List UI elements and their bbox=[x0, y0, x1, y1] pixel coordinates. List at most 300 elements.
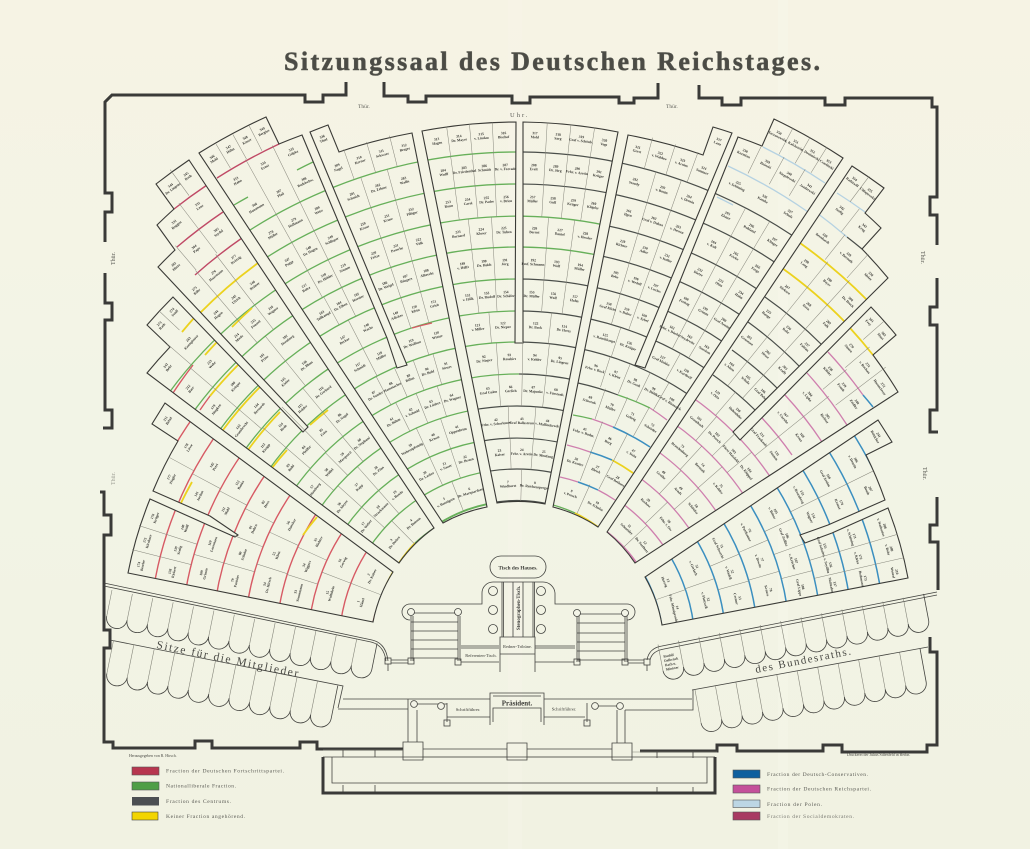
seats: 309 bbox=[334, 163, 340, 168]
seats: Dr. Lüders bbox=[424, 401, 441, 410]
seats: Graf Schwerin bbox=[711, 537, 725, 559]
seats: 302 bbox=[880, 331, 887, 337]
seats: Wehr bbox=[208, 360, 217, 370]
seats: Krause bbox=[834, 498, 842, 511]
seats: 260 bbox=[591, 201, 597, 206]
seats: Becker bbox=[339, 337, 351, 346]
seats: 296 bbox=[748, 223, 755, 229]
seats: v. Unruhe bbox=[776, 411, 789, 425]
seats: 118 bbox=[376, 351, 383, 357]
seats: Völk bbox=[415, 241, 423, 246]
seats: v. Below bbox=[767, 507, 777, 520]
referees' table: Referenten-Tisch. bbox=[465, 653, 497, 658]
seats: 36 bbox=[337, 501, 342, 507]
seats: Dr. Klöppel bbox=[739, 464, 753, 481]
seats: Dr. Nieper bbox=[476, 358, 493, 364]
seats: 332 bbox=[194, 201, 201, 207]
seats: 37 bbox=[354, 482, 359, 488]
seats: Reimer bbox=[249, 281, 261, 291]
panel: president's dais bbox=[323, 690, 717, 760]
seats: 254 bbox=[465, 197, 471, 202]
seats: 288 bbox=[531, 163, 537, 167]
seats: Schmidt bbox=[353, 363, 367, 373]
seats: Kerner bbox=[354, 158, 367, 165]
seats: 163 bbox=[703, 344, 710, 350]
seats: Banks bbox=[237, 479, 245, 490]
seats: Maltzahn bbox=[828, 577, 834, 592]
seats: Krüger bbox=[592, 173, 605, 179]
seats: 211 bbox=[163, 416, 169, 422]
seats bbox=[431, 123, 609, 501]
seats: 140 bbox=[180, 524, 186, 531]
seats: Dr. Schäfer bbox=[497, 294, 515, 298]
seats: Beuth bbox=[863, 486, 870, 496]
panel: left Bundesrat members' benches bbox=[104, 583, 388, 729]
seats: 261 bbox=[626, 209, 632, 214]
seats: Frank bbox=[836, 383, 845, 393]
seats: Dr. Braun bbox=[458, 457, 474, 465]
seats: 349 bbox=[259, 126, 266, 132]
seats: Graf Arnim bbox=[819, 469, 831, 487]
seats: 101 bbox=[696, 416, 703, 422]
seats: 177 bbox=[166, 474, 172, 481]
seats: Klotz bbox=[275, 550, 282, 560]
seats: Wolf bbox=[552, 264, 561, 268]
seats: 21 bbox=[442, 461, 447, 466]
seats: 251 bbox=[384, 214, 390, 219]
seats: v. Bennigsen bbox=[436, 497, 455, 509]
seats: 11 bbox=[627, 524, 632, 529]
seats: Mosle bbox=[235, 334, 244, 343]
seats: v. Benda bbox=[391, 490, 404, 501]
seats: Beseler bbox=[140, 559, 146, 571]
seats: 259 bbox=[570, 198, 576, 203]
seats: Dr. Hölder bbox=[317, 273, 334, 284]
seats: Buhl bbox=[287, 464, 295, 472]
seats: 278 bbox=[268, 229, 274, 236]
seats: Carol bbox=[464, 201, 473, 206]
seats: v. Denzin bbox=[847, 455, 857, 469]
seats: Graf Kleist bbox=[599, 304, 617, 312]
seats: 13 bbox=[665, 578, 671, 583]
seats: v. Rohr bbox=[884, 544, 891, 556]
seats: 191 bbox=[502, 258, 508, 262]
panel: seat block, far right wing bbox=[644, 419, 909, 626]
legend: left parties: Fraction der Deutschen Fortschrittspartei. bbox=[166, 768, 285, 774]
seats: 334 bbox=[260, 161, 267, 167]
seats: Bleich bbox=[591, 467, 601, 475]
seats: Senff bbox=[171, 308, 180, 317]
seats: 78 bbox=[768, 588, 773, 592]
seats: Krauss bbox=[764, 585, 770, 597]
seats: Grimm bbox=[697, 308, 709, 317]
seats: Dr. Nieper bbox=[495, 325, 512, 330]
seats: Lanz bbox=[713, 140, 722, 147]
seats: 65 bbox=[486, 386, 490, 391]
seats: Dr. Hertz bbox=[556, 327, 572, 334]
seats: Dr. Sander bbox=[367, 390, 384, 402]
seats: Grothe bbox=[656, 470, 667, 481]
seats: Frege bbox=[751, 266, 760, 274]
seats: Dr. Wolfson bbox=[403, 340, 422, 349]
seats: 70 bbox=[609, 402, 614, 407]
seats: v. Miller bbox=[471, 327, 485, 332]
seats: Frhr. Minnigerode bbox=[668, 594, 679, 623]
seats: Kamke bbox=[757, 196, 769, 205]
seats: 327 bbox=[787, 208, 793, 215]
seats: v. Hessler bbox=[577, 234, 593, 241]
seats: Hahn bbox=[233, 178, 243, 186]
seats: 245 bbox=[230, 294, 237, 301]
seats: 189 bbox=[460, 262, 465, 266]
seats: Dorn bbox=[802, 303, 810, 311]
seats: v. Below bbox=[619, 309, 633, 317]
seats: Chlapowski bbox=[859, 186, 876, 201]
seats: 271 bbox=[864, 362, 871, 368]
seats: Bebel bbox=[165, 416, 173, 426]
seats: 212 bbox=[185, 384, 191, 391]
seats: v. Kehler bbox=[712, 482, 724, 495]
seats: Dernburg bbox=[280, 334, 295, 346]
seats: 7 bbox=[507, 480, 509, 484]
seats: 187 bbox=[402, 274, 408, 279]
seats: 213 bbox=[206, 359, 213, 366]
seats: v. Hölk bbox=[462, 297, 474, 302]
seats: 150 bbox=[411, 304, 418, 310]
seats: Adickes bbox=[391, 313, 404, 321]
seats: 275 bbox=[191, 286, 198, 292]
seats: Sieurs bbox=[442, 364, 453, 371]
seats: Hasenclever bbox=[873, 379, 887, 396]
seats: 64 bbox=[449, 393, 454, 398]
seats: 148 bbox=[363, 323, 370, 328]
seats: Frhr. v. Dücker bbox=[659, 324, 682, 338]
seats: Albrecht bbox=[420, 271, 435, 278]
seats: v. Kehler bbox=[527, 357, 542, 362]
seats: Kreuz bbox=[794, 433, 803, 443]
seats: v. Nathusius bbox=[876, 518, 886, 537]
seats: 221 bbox=[393, 243, 399, 249]
seats: v. Sauer bbox=[439, 463, 453, 472]
table of the house: Tisch des Hauses. bbox=[499, 566, 538, 572]
seats: 292 bbox=[632, 177, 638, 182]
left secretary: Schriftführer. bbox=[456, 707, 480, 712]
door and clock labels bbox=[111, 104, 927, 485]
seats: Wehrenpfennig bbox=[401, 442, 424, 456]
seats: Lang bbox=[800, 261, 809, 269]
seats: 290 bbox=[574, 166, 580, 171]
seats: 267 bbox=[784, 284, 791, 290]
seats: 122 bbox=[500, 321, 506, 325]
seats: v. Kröcher bbox=[788, 553, 797, 571]
seats: Dr. Kaiser bbox=[367, 568, 378, 584]
seats: Seelig bbox=[176, 545, 183, 555]
seats: v. Puttkamer bbox=[740, 523, 752, 543]
outline bbox=[553, 119, 843, 527]
outline bbox=[147, 160, 434, 563]
seats: 80 bbox=[238, 551, 243, 556]
seats: Gerst bbox=[632, 148, 642, 154]
seats: 279 bbox=[290, 217, 297, 223]
seats: 43 bbox=[520, 417, 524, 421]
seats: 217 bbox=[301, 283, 308, 289]
seats: 252 bbox=[408, 207, 414, 212]
seats: Jüngken bbox=[211, 403, 222, 416]
seats: Dr. Schulze bbox=[587, 500, 604, 513]
seats: Tellkampf bbox=[316, 310, 332, 322]
seats: 299 bbox=[826, 277, 833, 283]
seats: v. Waldow bbox=[651, 153, 668, 162]
seats: 169 bbox=[825, 473, 831, 480]
seats: 263 bbox=[675, 224, 681, 230]
seat note: Minister bbox=[665, 665, 680, 672]
title: Sitzungssaal des Deutschen Reichstages. bbox=[284, 47, 820, 76]
seats: 149 bbox=[392, 311, 399, 316]
seats: 115 bbox=[297, 403, 303, 409]
seats: Seydel bbox=[213, 229, 224, 238]
seats: 56 bbox=[286, 520, 291, 525]
panel: seat block, centre right bbox=[552, 118, 844, 528]
seats: 123 bbox=[533, 321, 538, 326]
seats: 35 bbox=[313, 537, 318, 542]
seats: 180 bbox=[230, 381, 236, 387]
seats: Wölfel bbox=[325, 468, 334, 478]
seats: 1 bbox=[356, 600, 361, 603]
door and clock labels: Thür. bbox=[111, 472, 117, 485]
seats: 186 bbox=[381, 281, 388, 286]
seats: 281 bbox=[349, 191, 355, 197]
seats: 106 bbox=[784, 532, 790, 539]
seats: 237 bbox=[804, 341, 810, 348]
seats: 73 bbox=[680, 444, 685, 449]
seats: 10 bbox=[595, 500, 600, 505]
party arcs bbox=[646, 436, 880, 624]
seats: Jazdzewski bbox=[799, 183, 816, 196]
seat note: Rudolf bbox=[663, 653, 675, 659]
seats: 328 bbox=[822, 232, 828, 239]
seats: Thiel bbox=[319, 137, 328, 144]
seats: Struckmann bbox=[373, 502, 389, 518]
seats: 23 bbox=[498, 449, 501, 453]
seats: Bernuth bbox=[694, 462, 706, 474]
seats: 320 bbox=[601, 138, 607, 143]
seats: 282 bbox=[375, 183, 381, 188]
table of the house bbox=[490, 556, 546, 578]
seats: Gehrig bbox=[625, 414, 637, 422]
seats: 49 bbox=[678, 486, 683, 491]
seats: Czarlinski bbox=[819, 159, 834, 171]
bench row 2 bbox=[105, 640, 338, 729]
seats: Müller bbox=[527, 199, 538, 203]
bench row 1 bbox=[658, 594, 931, 681]
panel: seat block, centre bbox=[421, 122, 619, 505]
seats: Wallis bbox=[399, 179, 410, 185]
seats: Mohl bbox=[531, 135, 539, 139]
seats: 34 bbox=[302, 563, 307, 568]
seats: 311 bbox=[378, 149, 384, 154]
seats: Saucken bbox=[698, 345, 711, 355]
seats: v. Denzin bbox=[680, 196, 695, 205]
seats: Dirksen bbox=[779, 285, 791, 296]
seats: 227 bbox=[557, 228, 563, 232]
seats: 89 bbox=[406, 373, 411, 378]
seats: 172 bbox=[858, 554, 863, 560]
seats: 223 bbox=[455, 230, 461, 235]
seats: Vogt bbox=[600, 142, 608, 147]
seats: 154 bbox=[503, 290, 509, 294]
seats: Dr. Blum bbox=[300, 360, 314, 372]
seats: Sarg bbox=[554, 136, 562, 141]
seats: 58 bbox=[324, 467, 329, 473]
seats: 31 bbox=[694, 564, 699, 569]
seats: v. Kalt bbox=[706, 242, 718, 250]
seats bbox=[208, 125, 484, 511]
seats: 257 bbox=[530, 195, 535, 199]
seats: v. Hülft bbox=[457, 265, 470, 271]
rear piers and wall bbox=[403, 742, 632, 760]
seats: 286 bbox=[481, 164, 487, 168]
seats: Wolff bbox=[183, 523, 190, 533]
seats: Kraus bbox=[359, 224, 370, 231]
seats: 319 bbox=[578, 135, 584, 139]
seats: 9 bbox=[570, 489, 573, 493]
seats: 188 bbox=[423, 268, 429, 273]
seats: 156 bbox=[551, 292, 556, 296]
seats: Kruse bbox=[383, 217, 394, 223]
seats: 270 bbox=[848, 343, 855, 349]
seats: 3 bbox=[389, 538, 393, 542]
seats: 202 bbox=[764, 349, 771, 356]
seats: Pflüger bbox=[406, 210, 419, 217]
seats: 84 bbox=[301, 445, 306, 450]
seats: Dr. Wagner bbox=[443, 395, 462, 403]
seats: 99 bbox=[651, 386, 656, 392]
seats: 126 bbox=[626, 340, 633, 346]
seats: 175 bbox=[142, 537, 148, 543]
seats: Schmidt bbox=[347, 193, 361, 202]
seats: Dr. Moufang bbox=[533, 452, 553, 459]
seats: Rosshirt bbox=[503, 357, 517, 361]
seats: 79 bbox=[230, 578, 235, 583]
seats: 33 bbox=[293, 590, 298, 594]
seats: 164 bbox=[728, 361, 735, 367]
seats: Bischof bbox=[498, 135, 510, 139]
seats: Roth bbox=[184, 174, 193, 181]
seats: Rochow bbox=[640, 498, 652, 509]
legend: left parties: Nationalliberale Fraction. bbox=[166, 784, 237, 790]
seats: 322 bbox=[657, 151, 664, 156]
seats: 132 bbox=[774, 450, 780, 457]
seats: Baer bbox=[187, 385, 195, 394]
seats: Hoffmann bbox=[288, 218, 303, 229]
seats: 141 bbox=[194, 491, 200, 497]
seats: 240 bbox=[854, 399, 860, 405]
seats: 244 bbox=[213, 309, 219, 316]
seats: Herz bbox=[263, 500, 271, 509]
seats: 335 bbox=[288, 147, 295, 153]
seats: 236 bbox=[785, 325, 792, 331]
seats: 231 bbox=[664, 253, 670, 259]
seats: Beyer bbox=[822, 279, 832, 288]
right steps bbox=[577, 614, 627, 662]
seats: Dr. Groß bbox=[627, 379, 641, 388]
seats: 32 bbox=[706, 597, 711, 602]
seats: Most bbox=[876, 332, 885, 341]
seats: 142 bbox=[209, 462, 215, 469]
legend: right parties bbox=[733, 770, 872, 820]
seats: 306 bbox=[251, 202, 258, 208]
credit lines: Herausgegeben von R. Hirsch. bbox=[129, 754, 177, 758]
seats: Schlieper bbox=[325, 236, 340, 246]
seats: 301 bbox=[868, 317, 875, 323]
seats: 353 bbox=[825, 158, 832, 165]
seats: Hamburg bbox=[309, 482, 322, 497]
seats: 109 bbox=[199, 570, 204, 576]
seats: Dr. Weigel bbox=[378, 282, 394, 292]
seats: 269 bbox=[825, 319, 832, 326]
seats: 86 bbox=[337, 412, 342, 418]
seats: v. Otto bbox=[710, 391, 720, 400]
seats bbox=[155, 170, 422, 550]
seats: 96 bbox=[594, 363, 598, 368]
seats: Jörg bbox=[501, 262, 509, 266]
seats: 235 bbox=[765, 309, 772, 315]
seats: 268 bbox=[805, 301, 812, 308]
seats: 19 bbox=[392, 490, 398, 495]
seats: 127 bbox=[659, 355, 666, 361]
seats: 326 bbox=[761, 194, 768, 200]
seats: 38 bbox=[373, 465, 379, 471]
legend: left parties: Fraction des Centrums. bbox=[166, 799, 232, 805]
seats: Kozmian bbox=[736, 150, 751, 159]
seats: 72 bbox=[650, 422, 655, 428]
seats: 112 bbox=[235, 480, 241, 486]
left steps bbox=[411, 613, 460, 661]
seats: 103 bbox=[730, 448, 737, 455]
seats: 25 bbox=[542, 450, 546, 454]
seats: v. Kleist bbox=[608, 372, 622, 380]
seats: 166 bbox=[760, 388, 766, 395]
seats: 233 bbox=[717, 278, 724, 284]
seat note: Rath u. bbox=[665, 661, 677, 667]
seats: v. Gerlach bbox=[688, 560, 698, 576]
seats: Zeidler bbox=[849, 399, 859, 410]
seats: 307 bbox=[276, 188, 282, 195]
panel: seat block, left wing bbox=[146, 159, 435, 564]
seats: Hahn bbox=[734, 292, 743, 300]
legend: right parties: Fraction der Polen. bbox=[767, 802, 823, 808]
credit lines bbox=[129, 753, 910, 758]
party arcs bbox=[554, 146, 826, 526]
seats: 42 bbox=[494, 418, 498, 422]
panel: seat block, far left wing bbox=[127, 402, 394, 623]
seats: Klöpfer bbox=[587, 205, 600, 211]
seats: Dr. v. Forcade bbox=[494, 167, 517, 171]
seats: 303 bbox=[170, 261, 177, 268]
seats: Wagner bbox=[267, 306, 279, 316]
seats: Graf v. Schönb. bbox=[569, 138, 593, 145]
seats: Dr. Lasker bbox=[418, 471, 435, 482]
legend: right parties: Fraction der Socialdemokraten. bbox=[767, 814, 855, 820]
seats: Gelpke bbox=[287, 149, 299, 157]
seats: 323 bbox=[679, 158, 686, 163]
seats: Roggen bbox=[171, 220, 182, 230]
seats: 204 bbox=[807, 391, 813, 397]
seats: v. Alten bbox=[723, 362, 735, 373]
seats: Lorentzen bbox=[209, 536, 218, 552]
seats: Berger bbox=[399, 146, 411, 153]
seats: Evelt bbox=[530, 167, 539, 171]
